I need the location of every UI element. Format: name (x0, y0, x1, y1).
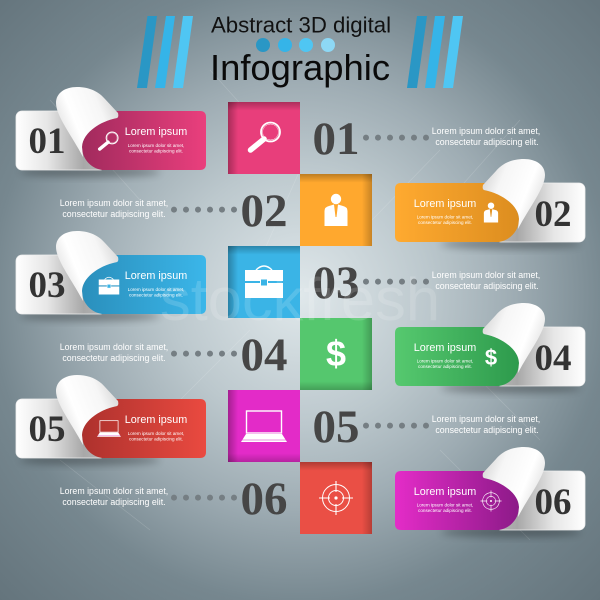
tab 02: orange (395, 159, 585, 249)
side text 04: consectetur adipiscing elit. (62, 353, 166, 363)
tab 04: green: $ (485, 345, 497, 370)
left title stripes (137, 16, 193, 88)
title: Infographic: Infographic (210, 47, 390, 88)
side text 03: consectetur adipiscing elit. (435, 281, 539, 291)
tab 05: red: 05 (28, 409, 66, 450)
center square 6: target (300, 462, 372, 534)
tab 05: red: Lorem ipsum dolor sit amet, (128, 431, 184, 436)
center square 1: search (228, 102, 300, 174)
tab 02: orange: consectetur adipiscing elit. (418, 220, 472, 225)
center number 06: 06 (240, 473, 288, 525)
dotted leader 03 (363, 279, 429, 285)
tab 04: green: Lorem ipsum (414, 342, 476, 354)
watermark: stockfresh (160, 266, 440, 333)
side text 06: consectetur adipiscing elit. (62, 497, 166, 507)
side text 01: Lorem ipsum dolor sit amet, (432, 126, 540, 136)
center square 4: dollar: $ (326, 333, 346, 374)
title dots (256, 38, 335, 52)
dotted leader 01 (363, 135, 429, 141)
tab 02: orange: Lorem ipsum dolor sit amet, (417, 214, 473, 220)
side text 05: consectetur adipiscing elit. (435, 425, 539, 435)
side text 06: Lorem ipsum dolor sit amet, (60, 486, 168, 496)
tab 06: purple: 06 (534, 482, 572, 523)
side text 02: consectetur adipiscing elit. (62, 209, 166, 219)
dotted leader 02 (171, 207, 237, 213)
tab 02: orange: Lorem ipsum (414, 198, 476, 210)
side text 05: Lorem ipsum dolor sit amet, (432, 414, 540, 424)
tab 01: pink: Lorem ipsum (125, 126, 187, 138)
side text 02: Lorem ipsum dolor sit amet, (60, 198, 168, 208)
tab 04: green (395, 303, 585, 393)
tab 06: purple: consectetur adipiscing elit. (418, 508, 472, 513)
center square 4: dollar (300, 318, 372, 390)
tab 04: green: Lorem ipsum dolor sit amet, (417, 358, 473, 364)
tab 03: blue (16, 231, 206, 321)
tab 04: green: consectetur adipiscing elit. (418, 364, 472, 369)
side text 03: Lorem ipsum dolor sit amet, (432, 270, 540, 280)
center square 2: person (300, 174, 372, 246)
center number 04: 04 (240, 329, 288, 381)
tab 04: green: 04 (534, 338, 572, 379)
side text 04: Lorem ipsum dolor sit amet, (60, 342, 168, 352)
center number 03: 03 (312, 257, 360, 309)
tab 02: orange: 02 (534, 194, 572, 235)
tab 05: red: consectetur adipiscing elit. (129, 436, 183, 442)
tab 06: purple: Lorem ipsum dolor sit amet, (417, 502, 473, 508)
tab 05: red: Lorem ipsum (125, 414, 187, 426)
tab 01: pink (16, 87, 206, 177)
center square 3: briefcase (228, 246, 300, 318)
center number 02: 02 (240, 185, 288, 237)
dotted leader 05 (363, 423, 429, 429)
tab 03: blue: consectetur adipiscing elit. (129, 292, 183, 298)
center square 5: laptop (228, 390, 300, 462)
dotted leader 04 (171, 351, 237, 357)
dotted leader 06 (171, 495, 237, 501)
tab 03: blue: Lorem ipsum dolor sit amet, (128, 287, 184, 292)
tab 03: blue: Lorem ipsum (125, 270, 187, 282)
title: Abstract 3D digital: Abstract 3D digital (211, 12, 391, 38)
tab 01: pink: Lorem ipsum dolor sit amet, (128, 143, 184, 148)
center number 01: 01 (312, 113, 360, 165)
tab 05: red (16, 375, 206, 465)
center number 05: 05 (312, 401, 360, 453)
tab 06: purple: Lorem ipsum (414, 486, 476, 498)
right title stripes (407, 16, 463, 88)
tab 01: pink: 01 (28, 121, 66, 162)
tab 01: pink: consectetur adipiscing elit. (129, 148, 183, 154)
side text 01: consectetur adipiscing elit. (435, 137, 539, 147)
tab 03: blue: 03 (28, 265, 66, 306)
tab 06: purple (395, 447, 585, 537)
